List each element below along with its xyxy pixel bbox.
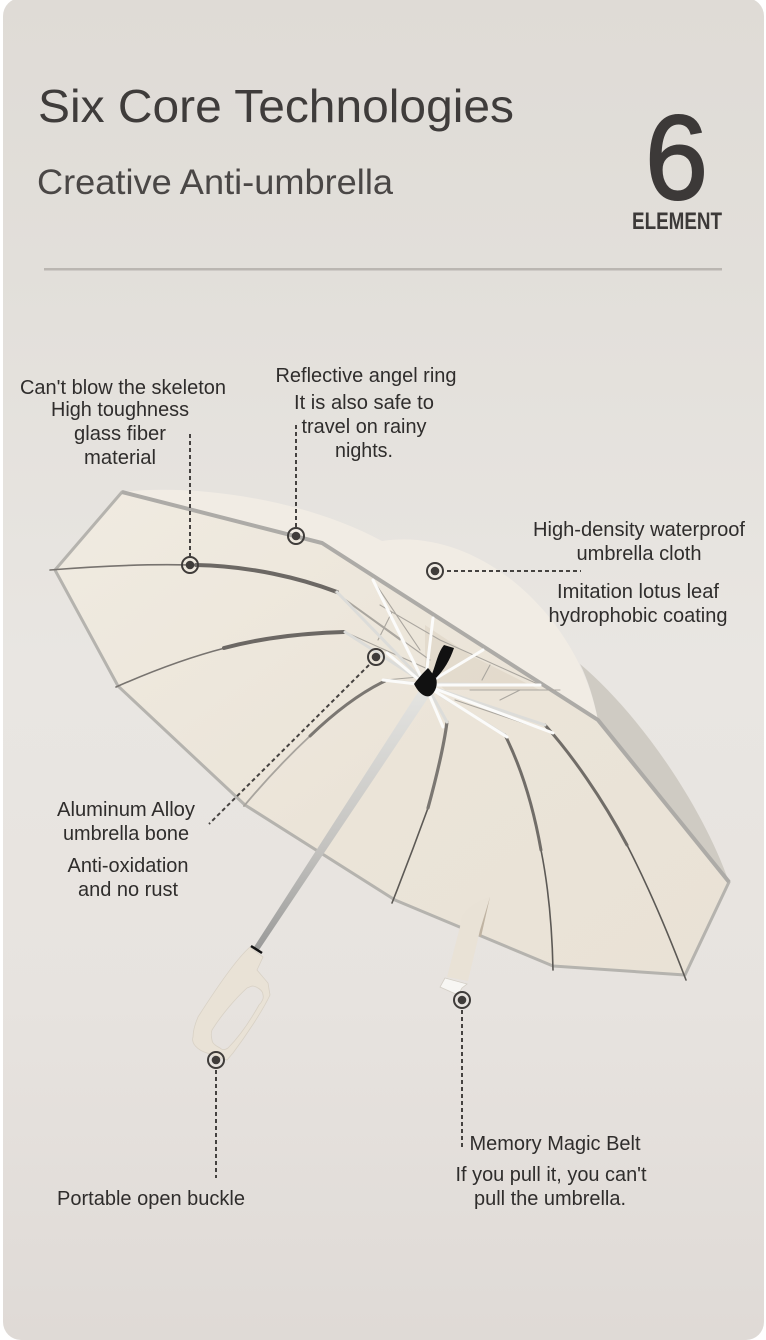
memory belt marker bbox=[454, 992, 470, 1008]
skeleton text: Can't blow the skeleton bbox=[20, 377, 226, 399]
memory belt text: pull the umbrella. bbox=[474, 1188, 626, 1210]
silver rib ends bbox=[337, 592, 545, 735]
white spokes bbox=[373, 580, 553, 737]
callout: skeleton bbox=[20, 377, 226, 573]
reflective ring text: It is also safe to bbox=[294, 392, 434, 414]
waterproof text: High-density waterproof bbox=[533, 519, 745, 541]
umbrella canopy underside bbox=[55, 492, 729, 975]
waterproof text bbox=[533, 519, 745, 627]
aluminum text bbox=[57, 799, 195, 901]
reflective ring text: travel on rainy bbox=[302, 416, 426, 438]
reflective ring text: Reflective angel ring bbox=[276, 365, 456, 387]
badge: 6 element bbox=[632, 91, 722, 235]
buckle marker bbox=[208, 1052, 224, 1068]
grey linkage rods bbox=[335, 580, 560, 733]
badge numeral: 6 bbox=[645, 91, 708, 225]
waterproof leader bbox=[447, 570, 581, 572]
aluminum leader bbox=[209, 665, 369, 824]
callout: open buckle bbox=[57, 1052, 245, 1210]
skeleton text: material bbox=[84, 447, 156, 469]
memory belt strap bbox=[447, 897, 490, 981]
title: Six Core Technologies bbox=[38, 80, 514, 132]
aluminum text: umbrella bone bbox=[63, 823, 189, 845]
aluminum text: Anti-oxidation bbox=[68, 855, 188, 877]
reflective ring text: nights. bbox=[335, 440, 393, 462]
memory belt leader bbox=[461, 1010, 463, 1147]
handle collar bbox=[251, 946, 262, 953]
umbrella shaded outer panel bbox=[580, 664, 729, 882]
buckle leader bbox=[215, 1070, 217, 1178]
skeleton marker bbox=[182, 557, 198, 573]
badge word: ELEMENT bbox=[632, 208, 722, 235]
ribs bbox=[50, 565, 686, 980]
reflective ring text bbox=[276, 365, 456, 462]
memory belt text: If you pull it, you can't bbox=[456, 1164, 647, 1186]
skeleton text: glass fiber bbox=[74, 423, 166, 445]
reflective ring marker bbox=[288, 528, 304, 544]
canopy edge trim bbox=[55, 492, 729, 975]
buckle text: Portable open buckle bbox=[57, 1188, 245, 1210]
shadow under ridge near hub bbox=[425, 625, 540, 690]
aluminum marker bbox=[368, 649, 384, 665]
waterproof text: hydrophobic coating bbox=[548, 605, 728, 627]
aluminum text: Aluminum Alloy bbox=[57, 799, 195, 821]
aluminum text: and no rust bbox=[78, 879, 178, 901]
umbrella outer canopy top bbox=[122, 490, 598, 720]
skeleton text bbox=[20, 377, 226, 469]
shaft bbox=[254, 689, 430, 950]
skeleton leader bbox=[189, 434, 191, 556]
hub bbox=[414, 645, 454, 696]
umbrella illustration bbox=[50, 490, 729, 1060]
waterproof text: Imitation lotus leaf bbox=[557, 581, 719, 603]
strap tab bbox=[440, 978, 467, 995]
callout: memory belt bbox=[454, 992, 647, 1210]
metal frame spokes bbox=[335, 580, 560, 737]
memory belt text: Memory Magic Belt bbox=[470, 1133, 641, 1155]
callout: waterproof cloth bbox=[427, 519, 745, 627]
ridge highlight bbox=[122, 492, 729, 882]
waterproof text: umbrella cloth bbox=[576, 543, 702, 565]
subtitle: Creative Anti-umbrella bbox=[37, 163, 394, 202]
reflective ring leader bbox=[295, 425, 297, 527]
callout: reflective ring bbox=[276, 365, 456, 544]
memory belt text bbox=[456, 1133, 647, 1210]
callout: aluminum bone bbox=[57, 649, 384, 901]
skeleton text: High toughness bbox=[51, 399, 189, 421]
handle bbox=[193, 947, 270, 1060]
strap shadow bbox=[472, 897, 490, 937]
waterproof marker bbox=[427, 563, 443, 579]
